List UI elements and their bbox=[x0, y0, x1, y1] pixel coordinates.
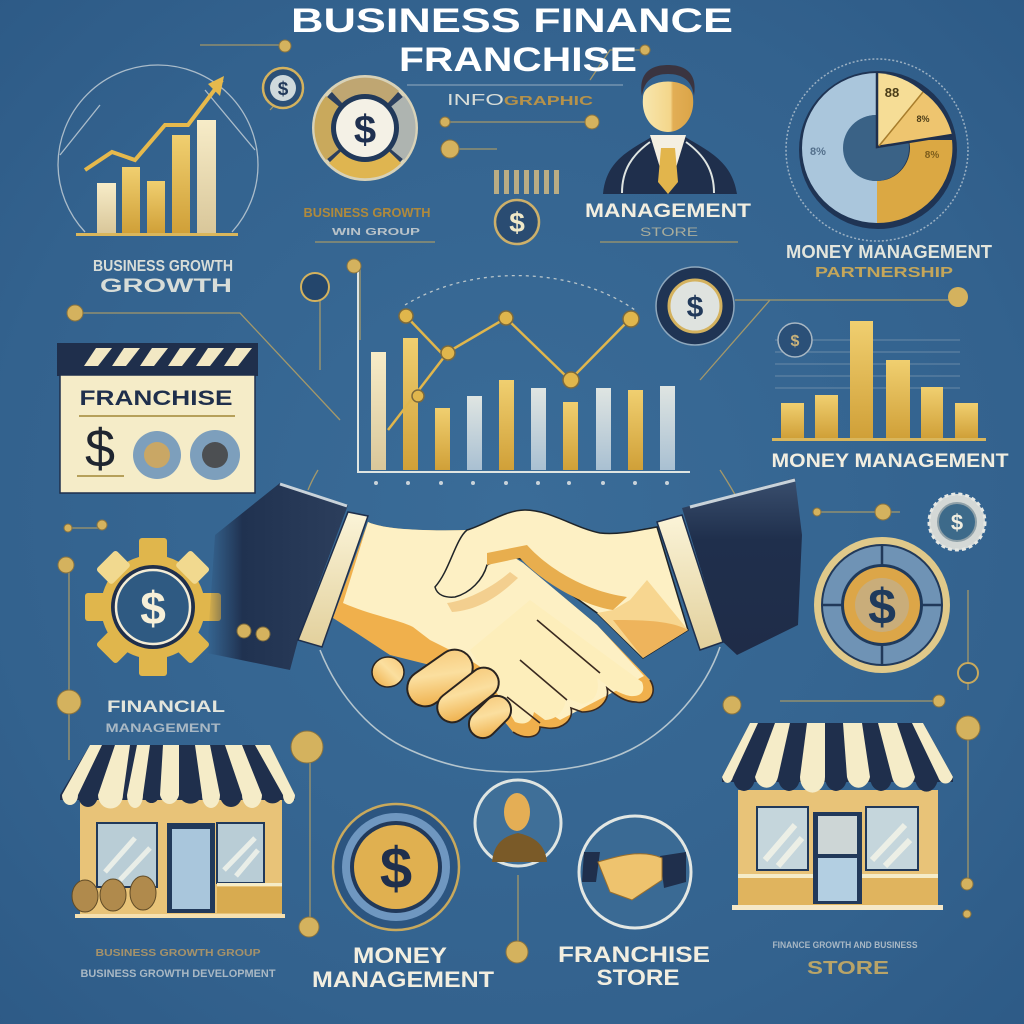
icon: small dollar badge top bbox=[263, 68, 303, 108]
icon: right dollar seal bbox=[929, 494, 985, 550]
wall bbox=[80, 800, 282, 915]
icon: dollar coin top centre bbox=[312, 75, 418, 181]
panel: business growth chart bbox=[58, 65, 258, 236]
left hand rim bbox=[333, 522, 653, 737]
icon: gear with dollar bbox=[85, 538, 221, 676]
label: management: MANAGEMENT bbox=[585, 201, 751, 222]
label: franchise store: STORE bbox=[596, 965, 680, 990]
finger separators bbox=[507, 620, 653, 737]
left cuff bbox=[298, 512, 368, 647]
label: money management bottom: MONEY bbox=[353, 943, 447, 968]
chart: right bar chart: $ bbox=[791, 333, 800, 350]
right palm bbox=[597, 580, 688, 658]
title bbox=[291, 2, 733, 79]
icon: handshake circle bbox=[579, 816, 691, 928]
subtitle: INFO GRAPHIC bbox=[447, 92, 594, 109]
text block: bottom left caption bbox=[80, 948, 276, 980]
panel: franchise sign: $ bbox=[85, 419, 115, 479]
left sleeve bbox=[207, 483, 348, 670]
sleeve highlights bbox=[280, 480, 795, 507]
icon: gear with dollar: $ bbox=[140, 582, 166, 634]
icon: person circle bbox=[475, 780, 561, 866]
label: franchise store bbox=[558, 942, 710, 990]
icon: dollar badge right of chart: $ bbox=[687, 291, 704, 324]
label: money management bottom bbox=[312, 943, 495, 992]
label: business growth bbox=[93, 258, 233, 297]
text block: blurred growth caption: BUSINESS GROWTH bbox=[304, 205, 430, 220]
right hand bbox=[435, 510, 688, 658]
text block: bottom left caption: BUSINESS GROWTH DEVELOPMENT bbox=[80, 968, 276, 980]
left hand upper bbox=[343, 522, 644, 720]
connector lines bbox=[68, 45, 968, 945]
icon: small dollar badge top: $ bbox=[278, 79, 289, 100]
label: money management: MONEY MANAGEMENT bbox=[772, 451, 1009, 472]
text block: bottom right caption: FINANCE GROWTH AND BUSINESS bbox=[772, 940, 918, 950]
label: money management partnership: PARTNERSHIP bbox=[815, 264, 953, 281]
label: financial management bbox=[106, 697, 225, 735]
panel: franchise sign: FRANCHISE bbox=[80, 387, 232, 410]
icon: right dollar seal: $ bbox=[951, 510, 963, 535]
title: BUSINESS FINANCE bbox=[291, 2, 733, 40]
text block: bottom right caption bbox=[772, 940, 918, 978]
text block: bottom left caption: BUSINESS GROWTH GROUP bbox=[96, 948, 261, 959]
illustration: right storefront bbox=[722, 723, 953, 910]
left fingers highlight bbox=[470, 600, 643, 724]
icon: right large coin: $ bbox=[868, 579, 896, 635]
chart: donut pie: 8% bbox=[810, 146, 826, 158]
icon: money coin bottom: $ bbox=[380, 836, 412, 901]
label: money management partnership bbox=[786, 242, 992, 281]
chart: right bar chart bbox=[772, 287, 986, 441]
thumbprint bbox=[447, 572, 518, 612]
icon: small building and coin: $ bbox=[509, 207, 525, 238]
icon: small building and coin bbox=[494, 170, 559, 244]
chart: donut pie: 8% bbox=[925, 150, 939, 161]
chart: donut pie: 8% bbox=[916, 114, 930, 124]
label: financial management: FINANCIAL bbox=[107, 697, 225, 716]
text block: blurred growth caption bbox=[304, 205, 430, 238]
label: business growth: BUSINESS GROWTH bbox=[93, 258, 233, 275]
label: money management partnership: MONEY MANAGEMENT bbox=[786, 242, 992, 262]
label: franchise store: FRANCHISE bbox=[558, 942, 710, 967]
illustration: handshake bbox=[207, 478, 802, 744]
text block: bottom right caption: STORE bbox=[807, 958, 889, 978]
label: financial management: MANAGEMENT bbox=[106, 721, 221, 735]
icon: right large coin bbox=[814, 537, 950, 673]
label: business growth: GROWTH bbox=[100, 276, 232, 297]
chart: donut pie: 88 bbox=[885, 85, 899, 100]
right hand band bbox=[487, 545, 627, 610]
icon: businessman bbox=[603, 65, 737, 194]
icon: cufflinks bbox=[237, 624, 270, 641]
chart: central bar and line chart bbox=[358, 270, 690, 485]
awning bbox=[60, 745, 295, 800]
illustration: left storefront bbox=[60, 745, 295, 918]
right sleeve bbox=[682, 478, 802, 655]
right cuff bbox=[657, 515, 723, 650]
icon: dollar badge right of chart bbox=[656, 267, 734, 345]
front fingers of right hand bbox=[372, 657, 404, 687]
chart: donut pie bbox=[786, 59, 968, 241]
label: management bbox=[585, 201, 751, 239]
icon: money coin bottom bbox=[333, 804, 459, 930]
label: money management bottom: MANAGEMENT bbox=[312, 967, 495, 992]
panel: franchise sign bbox=[57, 343, 258, 493]
label: management: STORE bbox=[640, 225, 698, 239]
title: FRANCHISE bbox=[399, 41, 637, 79]
text block: blurred growth caption: WIN GROUP bbox=[332, 227, 420, 238]
icon: dollar coin top centre: $ bbox=[354, 108, 376, 152]
